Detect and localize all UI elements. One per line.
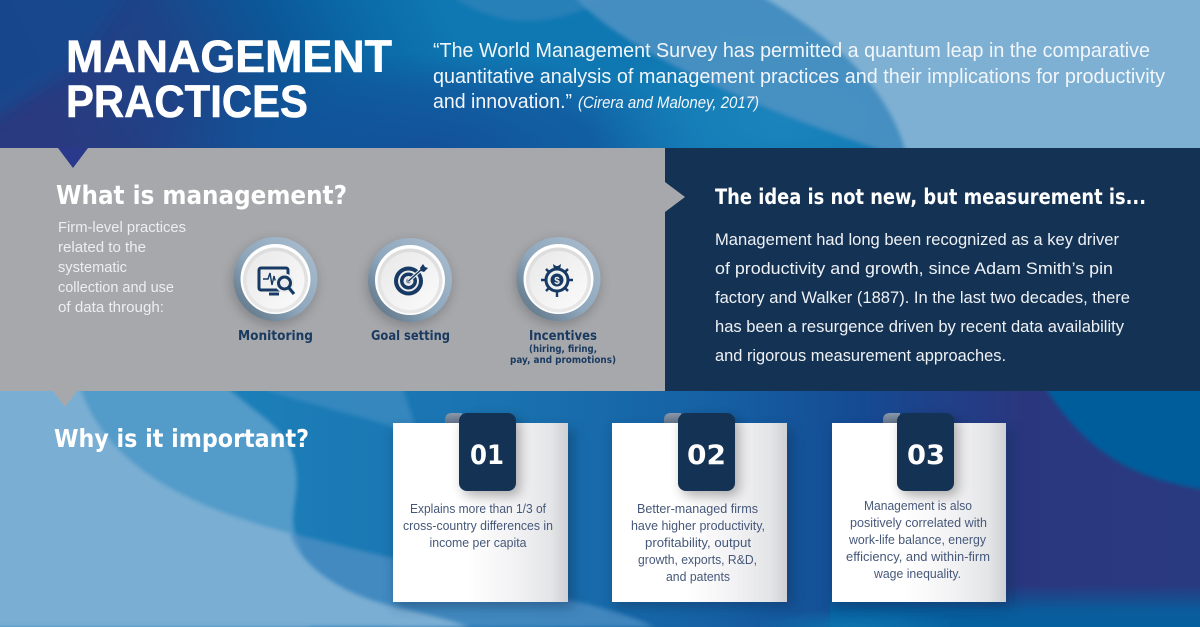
title: PRACTICES bbox=[66, 76, 308, 127]
title bbox=[66, 31, 392, 127]
pointer: lower section triangle bbox=[53, 391, 77, 407]
icon: goal setting bbox=[367, 238, 452, 326]
label: incentives bbox=[510, 329, 616, 366]
card 03: work-life balance, energy bbox=[848, 533, 987, 547]
heading: what is management: What is management? bbox=[56, 181, 347, 211]
card 02: 02 bbox=[687, 440, 726, 471]
card 03: efficiency, and within-firm bbox=[846, 550, 990, 564]
text: measurement body: Management had long been recognized as a key driver bbox=[715, 230, 1119, 249]
panel: what is management bbox=[0, 148, 665, 407]
text: definition: systematic bbox=[58, 259, 127, 276]
text: definition: related to the bbox=[58, 239, 146, 256]
icon: monitoring bbox=[232, 237, 318, 325]
quote: and innovation.” bbox=[433, 91, 572, 113]
card 01: Explains more than 1/3 of bbox=[410, 502, 547, 516]
card 01 bbox=[393, 413, 574, 607]
card 02: growth, exports, R&D, bbox=[638, 553, 757, 567]
header background bbox=[0, 0, 1200, 148]
card 01: income per capita bbox=[430, 536, 527, 550]
pointer: header triangle bbox=[58, 148, 88, 168]
card 03: positively correlated with bbox=[850, 516, 987, 530]
label: monitoring: Monitoring bbox=[238, 329, 313, 344]
text: measurement body: of productivity and growth, since Adam Smith’s pin bbox=[715, 259, 1113, 278]
card 01: cross-country differences in bbox=[403, 519, 553, 533]
heading: why is it important: Why is it important? bbox=[54, 424, 309, 453]
icon: incentives bbox=[516, 237, 600, 325]
label: incentives: pay, and promotions) bbox=[510, 355, 616, 366]
text: measurement body: has been a resurgence driven by recent data availability bbox=[715, 317, 1124, 336]
arrow bbox=[665, 182, 685, 212]
text: definition bbox=[58, 219, 186, 316]
card 02: profitability, output bbox=[645, 536, 752, 550]
text: definition: collection and use bbox=[58, 279, 174, 296]
card 02 bbox=[612, 413, 793, 607]
quote: quantitative analysis of management practices and their implications for productivity bbox=[433, 66, 1165, 88]
card 03: 03 bbox=[907, 440, 945, 471]
panel: the idea is not new bbox=[665, 148, 1200, 391]
card 02: and patents bbox=[666, 570, 730, 584]
card 02: Better-managed firms bbox=[637, 502, 758, 516]
title: MANAGEMENT bbox=[66, 31, 392, 82]
text: definition: of data through: bbox=[58, 299, 164, 316]
card 03: wage inequality. bbox=[873, 567, 961, 581]
text: measurement body bbox=[715, 230, 1130, 365]
text: definition: Firm-level practices bbox=[58, 219, 186, 236]
quote bbox=[433, 40, 1165, 113]
quote: (Cirera and Maloney, 2017) bbox=[578, 93, 759, 112]
card 03: Management is also bbox=[864, 499, 972, 513]
icon: incentives: $ bbox=[554, 276, 560, 287]
text: measurement body: factory and Walker (1887). In the last two decades, there bbox=[715, 288, 1130, 307]
card 03 bbox=[832, 413, 1012, 607]
label: incentives: (hiring, firing, bbox=[529, 344, 597, 355]
card 02: have higher productivity, bbox=[631, 519, 765, 533]
label: incentives: Incentives bbox=[529, 329, 597, 344]
quote: “The World Management Survey has permitted a quantum leap in the comparative bbox=[433, 40, 1150, 62]
label: goal setting: Goal setting bbox=[371, 329, 450, 344]
card 01: 01 bbox=[470, 440, 504, 471]
lower section background bbox=[0, 380, 1200, 627]
text: measurement body: and rigorous measurement approaches. bbox=[715, 346, 1006, 365]
